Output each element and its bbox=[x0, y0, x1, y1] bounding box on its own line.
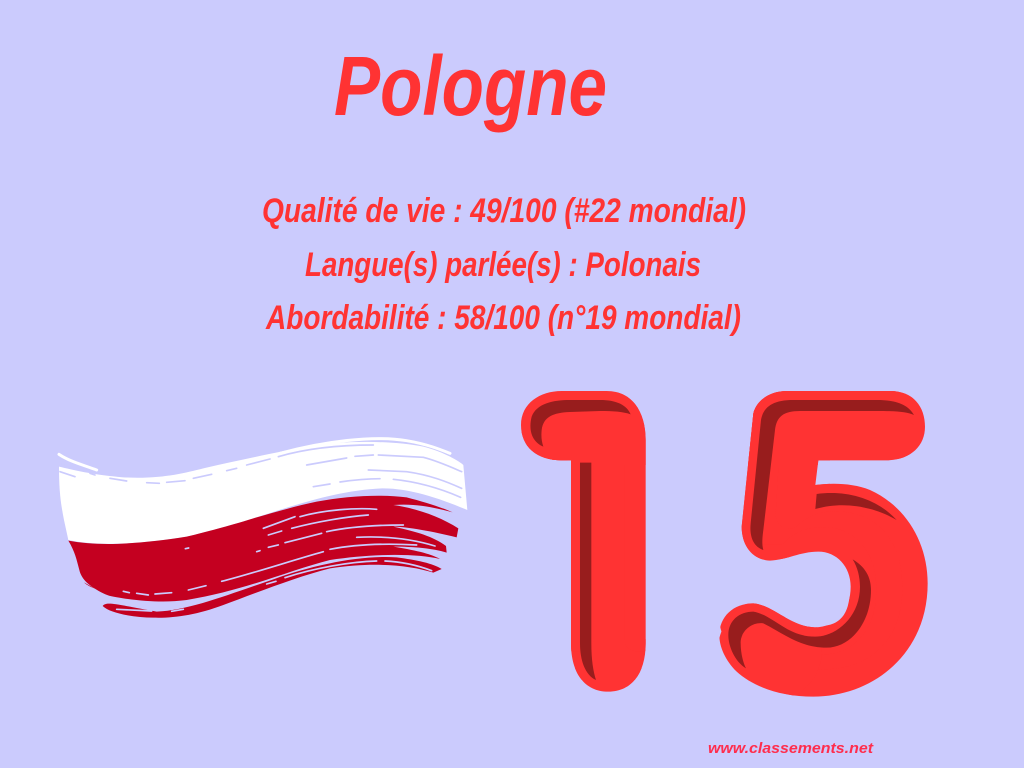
quality of life line: Qualité de vie : 49/100 (#22 mondial) bbox=[262, 192, 746, 230]
affordability line: Abordabilité : 58/100 (n°19 mondial) bbox=[265, 299, 741, 337]
big number 15 bbox=[521, 391, 928, 697]
digit 1: 1 bbox=[488, 318, 710, 765]
digit 5 bbox=[720, 391, 928, 697]
digit 1 bbox=[521, 391, 646, 692]
languages line: Langue(s) parlée(s) : Polonais bbox=[305, 246, 701, 284]
text block: country facts bbox=[262, 192, 746, 337]
footer website: www.classements.net bbox=[708, 740, 874, 757]
title: Pologne bbox=[334, 39, 607, 133]
icon: Polish flag brush stroke bbox=[59, 439, 467, 618]
digit 5: 5 bbox=[719, 318, 926, 766]
